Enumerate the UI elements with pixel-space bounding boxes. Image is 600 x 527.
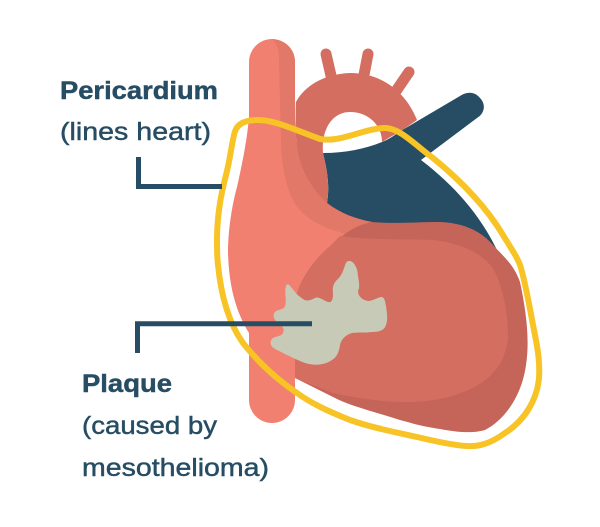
label: plaque: (caused by	[82, 412, 218, 440]
label: plaque: Plaque	[82, 370, 172, 398]
ventricle shadow	[295, 222, 528, 432]
label: plaque: mesothelioma)	[82, 454, 269, 482]
label: plaque	[82, 370, 269, 482]
label: pericardium	[60, 77, 218, 146]
label: pericardium: (lines heart)	[60, 118, 211, 146]
shaded strip on vena cava	[273, 39, 372, 234]
pulmonary artery and dark upper heart	[323, 93, 500, 262]
ventricle body	[295, 236, 508, 402]
vena cava and right atrium	[228, 39, 372, 423]
pericardium outline	[217, 120, 539, 446]
aorta arch	[296, 73, 417, 225]
label: pericardium: Pericardium	[60, 77, 218, 105]
plaque	[271, 261, 387, 365]
leader line: plaque	[138, 324, 312, 353]
leader line: pericardium	[138, 157, 222, 186]
aorta branches	[326, 54, 409, 94]
